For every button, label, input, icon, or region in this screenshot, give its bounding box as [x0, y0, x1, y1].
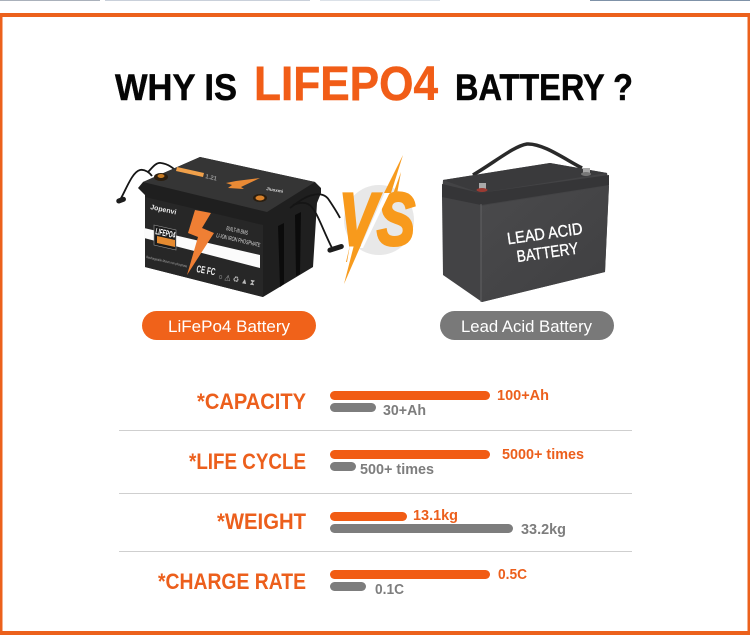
left cable: [120, 163, 179, 200]
row: weight: 13.1kg: [413, 508, 458, 524]
battery side ribs: [278, 223, 284, 287]
battery label: [506, 220, 586, 267]
battery front: [145, 197, 263, 297]
pill: LiFePo4 Battery: LiFePo4 Battery: [168, 317, 290, 336]
top image strip: [0, 0, 750, 1]
VS badge: [339, 155, 415, 284]
model badge: [154, 225, 176, 250]
lid label: [176, 167, 204, 177]
row: weight: 33.2kg: [521, 522, 566, 538]
model badge: LIFEPO4: [155, 226, 176, 240]
row: life cycle: *LIFE CYCLE: [189, 449, 306, 474]
carrying handle: [473, 144, 582, 175]
LiFePO4 battery illustration: Jiuoxmi: [266, 186, 283, 194]
front brand: Jopenvi: [150, 204, 177, 216]
row: weight: [217, 508, 566, 538]
row: capacity: [197, 388, 549, 419]
LiFePO4 battery illustration: [116, 157, 344, 297]
battery lid: [443, 163, 607, 193]
white band: [144, 228, 260, 268]
title: LIFEPO4: [254, 58, 438, 111]
row: capacity: 100+Ah: [497, 388, 549, 404]
row: charge rate: [158, 567, 527, 598]
terminals: [154, 173, 168, 181]
corner edge: [480, 204, 482, 302]
row: charge rate: 0.5C: [498, 567, 527, 583]
pill: Lead Acid Battery: [440, 311, 614, 340]
battery lid: [143, 157, 315, 212]
lightning bolt: [187, 210, 214, 275]
spec text: BUILT-IN BMS: [226, 226, 248, 237]
lightning streak: [360, 190, 391, 248]
row: life cycle: 500+ times: [360, 462, 434, 478]
right cable: [290, 194, 340, 248]
grey disc: [344, 185, 414, 255]
title: [115, 58, 633, 111]
row: capacity: *CAPACITY: [197, 389, 306, 414]
LiFePO4 battery illustration: LI-ION IRON PHOSPHATE: [216, 233, 261, 249]
lead acid battery illustration: [442, 144, 609, 302]
title: BATTERY ?: [455, 67, 633, 108]
row: capacity: 30+Ah: [383, 403, 426, 419]
LiFePO4 battery illustration: 1.21: [205, 174, 218, 183]
battery silhouette: [138, 157, 321, 297]
LiFePO4 battery illustration: Rechargeable lithium iron phosphate: [146, 255, 188, 268]
LiFePO4 battery illustration: ○ ⚠ ♻ ▲ ⧗: [218, 272, 256, 287]
pill: Lead Acid Battery: Lead Acid Battery: [461, 317, 592, 336]
row: charge rate: 0.1C: [375, 582, 404, 598]
battery silhouette: [442, 163, 609, 302]
battery front: [481, 186, 609, 302]
certification marks: CE FC: [195, 264, 216, 278]
VS letters: VS: [339, 178, 415, 261]
row: life cycle: [189, 447, 584, 478]
title: WHY IS: [115, 67, 237, 108]
lid rim: [442, 175, 609, 205]
terminals: [476, 168, 591, 192]
pill: LiFePo4 Battery: [142, 311, 316, 340]
row: life cycle: 5000+ times: [502, 447, 584, 463]
row: charge rate: *CHARGE RATE: [158, 569, 306, 594]
battery label: BATTERY: [516, 240, 579, 266]
row: weight: *WEIGHT: [217, 509, 307, 534]
battery label: LEAD ACID: [506, 220, 584, 248]
